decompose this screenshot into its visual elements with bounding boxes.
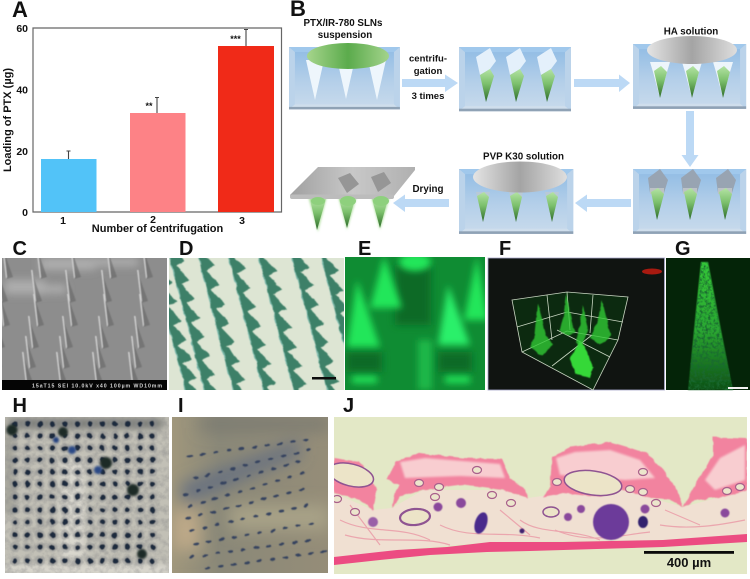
mottling noise	[5, 417, 169, 573]
step 3: HA solution	[633, 26, 746, 109]
step 5: PVP K30 solution	[459, 152, 573, 234]
centrifugation text	[409, 54, 447, 102]
y axis tick labels: 0	[22, 207, 28, 219]
drying text: Drying	[412, 184, 444, 195]
error bars	[66, 30, 248, 159]
label I: I	[178, 395, 184, 417]
grid lines	[512, 292, 628, 390]
x axis tick labels: 3	[239, 215, 245, 227]
dye dots grid	[10, 419, 158, 566]
panel G: single needle confocal image	[666, 258, 750, 390]
purple glands	[368, 498, 730, 540]
panel H: stained skin top view	[5, 417, 169, 573]
significance marks	[145, 34, 241, 111]
chart axes	[33, 28, 282, 212]
final microneedle patch	[290, 167, 415, 232]
y axis tick labels: 40	[16, 84, 28, 96]
dye dot rows	[183, 438, 327, 570]
dark blotches	[6, 424, 147, 559]
step 1: SLN suspension on mould: suspension	[318, 30, 372, 41]
centrifugation text: centrifu-	[409, 54, 447, 64]
lighter mesh inside dermis	[400, 445, 745, 490]
box walls and floor	[512, 292, 628, 390]
scale bar	[728, 387, 748, 389]
x axis tick labels: 1	[60, 215, 66, 227]
scale bar	[312, 377, 336, 380]
label C: C	[12, 238, 27, 260]
step 1: SLN suspension on mould	[289, 18, 400, 109]
label F: F	[499, 238, 511, 260]
y axis title: Loading of PTX (µg)	[2, 68, 14, 172]
needle rows	[2, 258, 153, 380]
SEM info strip	[2, 380, 167, 390]
hair follicle ovals	[326, 459, 623, 526]
arrow: step 3 to 4	[682, 111, 698, 167]
step 2: after centrifugation	[459, 47, 571, 111]
y axis tick labels: 60	[16, 23, 28, 35]
lighter top substrate patches	[5, 258, 138, 294]
orientation arrows	[642, 268, 662, 274]
connective tissue strands	[340, 505, 745, 545]
panel F: 3D confocal image	[488, 258, 664, 390]
dark areas	[346, 265, 472, 372]
arrow: step 2 to 3	[574, 74, 630, 92]
x axis tick labels: 2	[150, 214, 156, 226]
needle	[688, 262, 733, 390]
bar 2: pink	[130, 113, 186, 212]
label G: G	[675, 238, 691, 260]
green pyramids	[530, 293, 611, 378]
panel D: optical image of microneedles	[169, 258, 344, 390]
panel A: bar chart of PTX loading	[2, 0, 282, 235]
scale bar	[644, 551, 734, 554]
y axis tick labels	[16, 23, 28, 219]
panel C: SEM image of microneedles	[0, 246, 167, 390]
arrow: drying	[393, 194, 449, 212]
pink dermis chunks	[334, 437, 747, 510]
label E: E	[358, 238, 371, 260]
lower muscle band	[334, 534, 747, 565]
small ring follicles	[332, 466, 744, 516]
label D: D	[179, 238, 193, 260]
scale bar label: 400 µm	[667, 555, 711, 570]
pale connective tissue	[334, 490, 747, 557]
panel B: fabrication process diagram	[289, 0, 746, 234]
label J: J	[343, 395, 354, 417]
SEM info text: 15aT15 SEI 10.0kV x40 100µm WD10mm	[32, 384, 162, 390]
arrow: centrifugation	[402, 74, 458, 92]
label H: H	[12, 395, 27, 417]
needle columns	[169, 258, 344, 390]
panel J: H&E histology section	[326, 417, 747, 574]
x axis title: Number of centrifugation	[92, 223, 223, 235]
needle speckle	[688, 262, 733, 390]
panel I: stained skin side view	[172, 417, 330, 573]
step 5: PVP K30 solution: PVP K30 solution	[483, 152, 564, 162]
bar 3: red	[218, 46, 274, 212]
x axis tick labels	[60, 214, 245, 227]
tonal bands	[172, 418, 330, 550]
bar 1: blue	[41, 159, 96, 212]
step 1: SLN suspension on mould: PTX/IR-780 SLNs	[304, 18, 383, 29]
y axis tick labels: 20	[16, 146, 28, 158]
bright cones	[347, 253, 488, 390]
centrifugation text: gation	[414, 66, 442, 77]
step 4: HA dried	[633, 169, 746, 234]
mottled edges	[5, 419, 169, 573]
arrow: step 4 to 5	[575, 194, 631, 212]
panel E: fluorescence image of needles	[345, 253, 488, 390]
significance marks: **	[145, 101, 153, 111]
step 3: HA solution: HA solution	[664, 26, 718, 38]
centrifugation text: 3 times	[412, 91, 444, 102]
significance marks: ***	[230, 34, 241, 44]
